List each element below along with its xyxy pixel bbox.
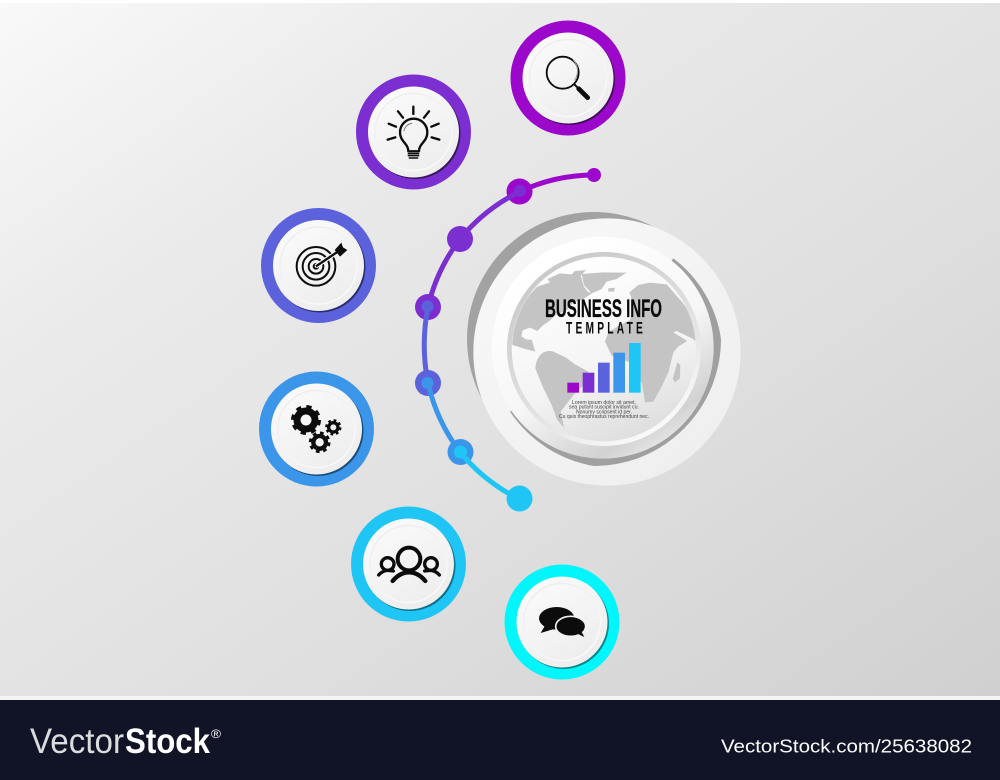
title: TEMPLATE	[566, 319, 643, 337]
body text: Nonumy scripserit id per.	[576, 409, 632, 415]
vectorstock logo: Vector	[30, 722, 124, 761]
node: idea	[356, 74, 471, 190]
footer divider	[0, 696, 1000, 700]
icon: target with arrow	[297, 243, 347, 286]
timeline arc with dots	[415, 168, 601, 512]
vectorstock logo	[30, 722, 221, 761]
body text: Cu quis theophrastus reprehendunt nec.	[559, 414, 649, 420]
node: search	[510, 20, 626, 136]
footer bar	[0, 700, 1000, 780]
icon: magnifying glass	[547, 57, 588, 98]
bar chart	[567, 343, 641, 393]
node: chat	[504, 564, 620, 680]
icon: speech bubbles	[539, 607, 586, 637]
icon: people	[379, 548, 439, 581]
node: target	[261, 208, 376, 323]
body text: Lorem ipsum dolor sit amet,	[572, 400, 636, 406]
body text	[559, 400, 649, 420]
vectorstock logo: Stock	[125, 722, 210, 761]
icon: gears	[293, 407, 340, 452]
vectorstock logo: ®	[211, 727, 221, 741]
body text: sea putant suscipit invidunt cu.	[569, 405, 639, 411]
world map	[503, 270, 700, 428]
node: gears	[259, 372, 374, 486]
icon: light bulb	[388, 107, 439, 158]
node: team	[351, 506, 466, 622]
image id: VectorStock.com/25638082	[721, 736, 972, 756]
title	[545, 295, 662, 337]
title: BUSINESS INFO	[545, 295, 662, 323]
central globe emblem	[467, 212, 741, 486]
